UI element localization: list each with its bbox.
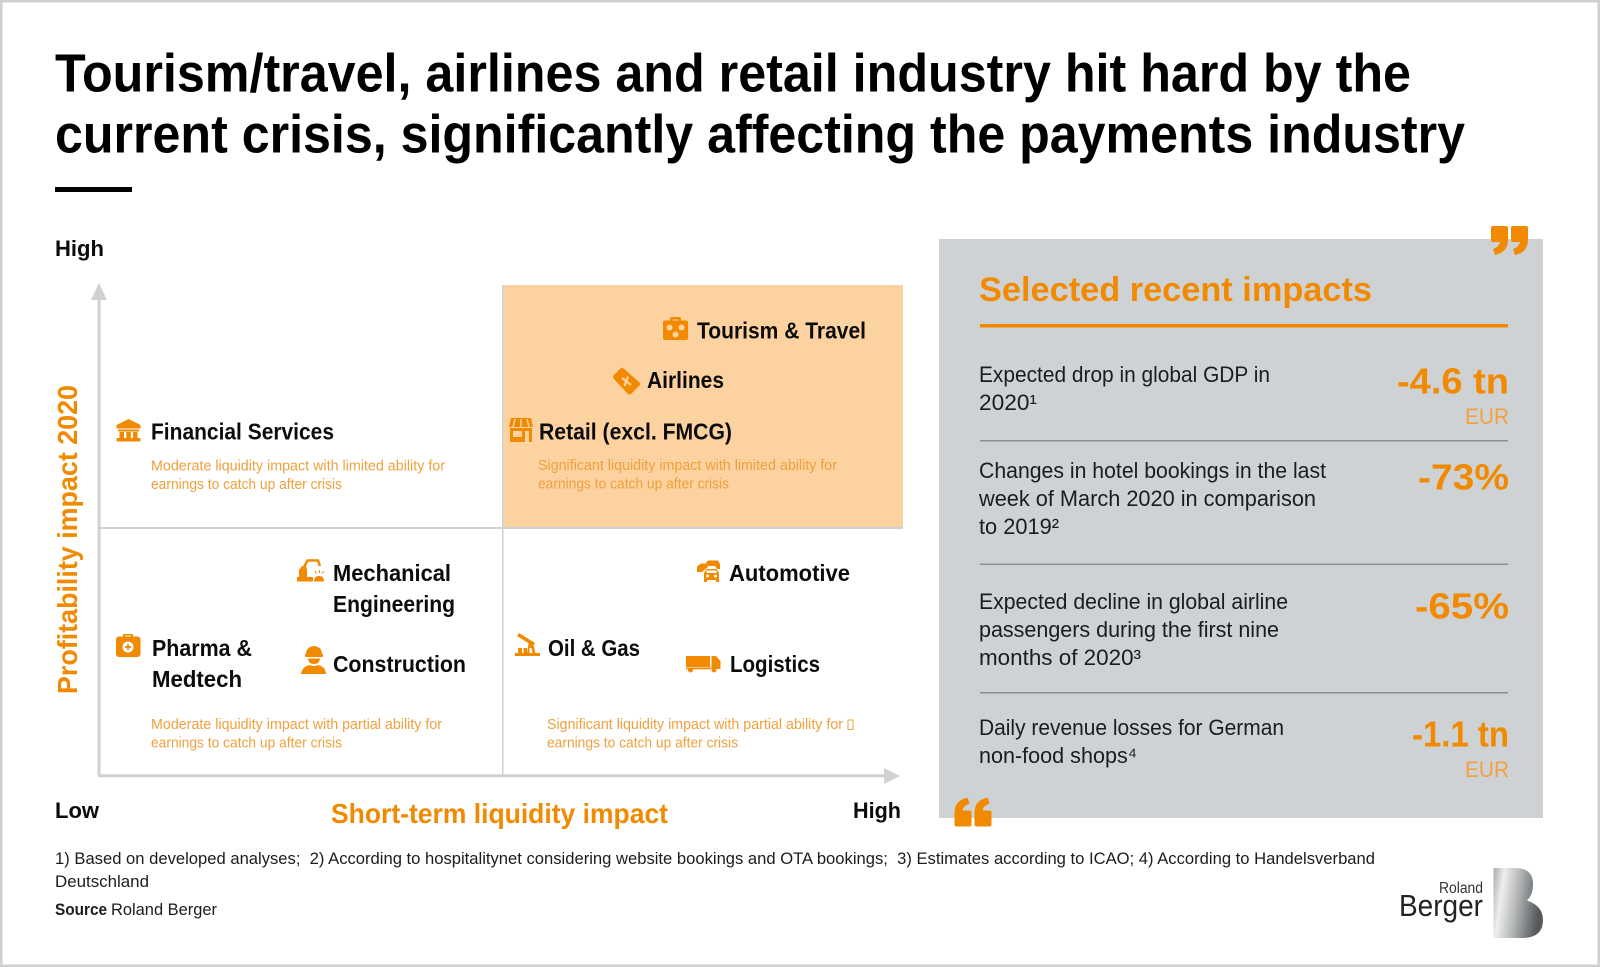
quadrant: pharma, mechanical, construction: Construction xyxy=(333,651,466,677)
row: airline passengers: passengers during the first nine xyxy=(979,617,1279,642)
row: airline passengers: months of 2020³ xyxy=(979,645,1141,670)
icon: robot arm xyxy=(297,560,324,582)
panel: selected recent impacts xyxy=(939,226,1543,826)
source: Source xyxy=(55,901,107,919)
quadrant: automotive, oil and gas, logistics: Significant liquidity impact with partial ability for xyxy=(547,717,843,733)
axis title: x: Short-term liquidity impact xyxy=(331,798,668,829)
quadrant: financial services: Moderate liquidity impact with limited ability for xyxy=(151,458,445,474)
quadrant: tourism, airlines, retail: Significant liquidity impact with limited ability for xyxy=(538,458,837,474)
row: gdp xyxy=(979,360,1509,429)
axis label: low: Low xyxy=(55,798,99,823)
quadrant: tourism, airlines, retail xyxy=(509,317,866,492)
horizontal axis arrow xyxy=(98,768,900,784)
title xyxy=(55,44,1465,164)
row: hotel bookings: -73% xyxy=(1418,456,1509,498)
icon: medical case xyxy=(116,634,140,657)
title: Tourism/travel, airlines and retail industry hit hard by the xyxy=(55,44,1411,104)
title: current crisis, significantly affecting the payments industry xyxy=(55,104,1465,164)
matrix chart xyxy=(52,236,903,829)
quadrant: automotive, oil and gas, logistics: Oil & Gas xyxy=(548,635,640,661)
row: revenue losses: -1.1 tn xyxy=(1412,714,1509,754)
quadrant: pharma, mechanical, construction: Medtech xyxy=(152,666,242,692)
row: gdp: 2020¹ xyxy=(979,390,1037,415)
quadrant: tourism, airlines, retail: Airlines xyxy=(647,367,724,393)
quadrant: automotive, oil and gas, logistics: Logistics xyxy=(730,651,820,677)
highlighted quadrant xyxy=(503,285,903,527)
axis label: high x: High xyxy=(853,798,901,823)
axis title: y: Profitability impact 2020 xyxy=(52,385,83,694)
quadrant: financial services xyxy=(116,418,445,493)
panel heading: Selected recent impacts xyxy=(979,271,1372,309)
quadrant: pharma, mechanical, construction: Pharma & xyxy=(152,635,252,661)
row: hotel bookings xyxy=(978,456,1509,539)
quadrant: tourism, airlines, retail: earnings to catch up after crisis xyxy=(538,476,729,492)
quadrant: automotive, oil and gas, logistics: Automotive xyxy=(729,560,850,586)
logo: Roland Berger: Berger xyxy=(1399,888,1483,923)
source xyxy=(55,901,217,919)
logo: Roland Berger xyxy=(1399,868,1543,938)
row: revenue losses: Daily revenue losses for German xyxy=(979,715,1284,740)
footnotes xyxy=(55,850,1375,891)
quadrant: pharma, mechanical, construction: Engineering xyxy=(333,591,455,617)
icon: airline ticket xyxy=(616,370,638,392)
source: Roland Berger xyxy=(111,901,217,919)
row: revenue losses: EUR xyxy=(1465,757,1509,782)
quadrant: pharma, mechanical, construction xyxy=(116,560,466,752)
row: gdp: -4.6 tn xyxy=(1397,360,1509,402)
icon: suitcase xyxy=(663,317,688,340)
icon: cars xyxy=(697,560,720,582)
quadrant: pharma, mechanical, construction: Moderate liquidity impact with partial ability for xyxy=(151,717,442,733)
quadrant: automotive, oil and gas, logistics: earnings to catch up after crisis xyxy=(547,736,738,752)
axis label: high y: High xyxy=(55,236,104,261)
row: gdp: EUR xyxy=(1465,404,1509,429)
quadrant: pharma, mechanical, construction: earnings to catch up after crisis xyxy=(151,736,342,752)
quadrant: financial services: Financial Services xyxy=(151,418,334,444)
row: revenue losses xyxy=(979,714,1509,782)
icon: truck xyxy=(686,656,720,672)
icon: oil pump xyxy=(515,633,540,656)
vertical axis arrow xyxy=(91,283,107,776)
footnotes: 1) Based on developed analyses; 2) According to hospitalitynet considering website bookings and OTA bookings; 3) Estimates according to ICAO; 4) According to Handelsverband xyxy=(55,850,1375,868)
icon: closing quote xyxy=(1491,226,1528,255)
icon: opening quote xyxy=(954,798,992,826)
quadrant: tourism, airlines, retail: Tourism & Travel xyxy=(697,318,866,344)
icon: bank xyxy=(116,419,140,442)
row: hotel bookings: to 2019² xyxy=(979,514,1059,539)
row: airline passengers xyxy=(979,586,1509,670)
quadrant: financial services: earnings to catch up after crisis xyxy=(151,477,342,493)
row: revenue losses: non-food shops⁴ xyxy=(979,743,1137,768)
quadrant: automotive, oil and gas, logistics xyxy=(515,560,853,752)
row: hotel bookings: week of March 2020 in comparison xyxy=(978,486,1316,511)
logo: Roland Berger: Roland xyxy=(1439,880,1483,897)
icon: store xyxy=(509,418,533,442)
icon: construction worker xyxy=(301,646,326,674)
row: hotel bookings: Changes in hotel bookings in the last xyxy=(979,458,1326,483)
quadrant: pharma, mechanical, construction: Mechanical xyxy=(333,560,451,586)
row: airline passengers: -65% xyxy=(1415,586,1509,626)
footnotes: Deutschland xyxy=(55,873,149,891)
row: gdp: Expected drop in global GDP in xyxy=(979,362,1270,387)
quadrant: tourism, airlines, retail: Retail (excl. FMCG) xyxy=(539,418,732,444)
row: airline passengers: Expected decline in global airline xyxy=(979,589,1288,614)
